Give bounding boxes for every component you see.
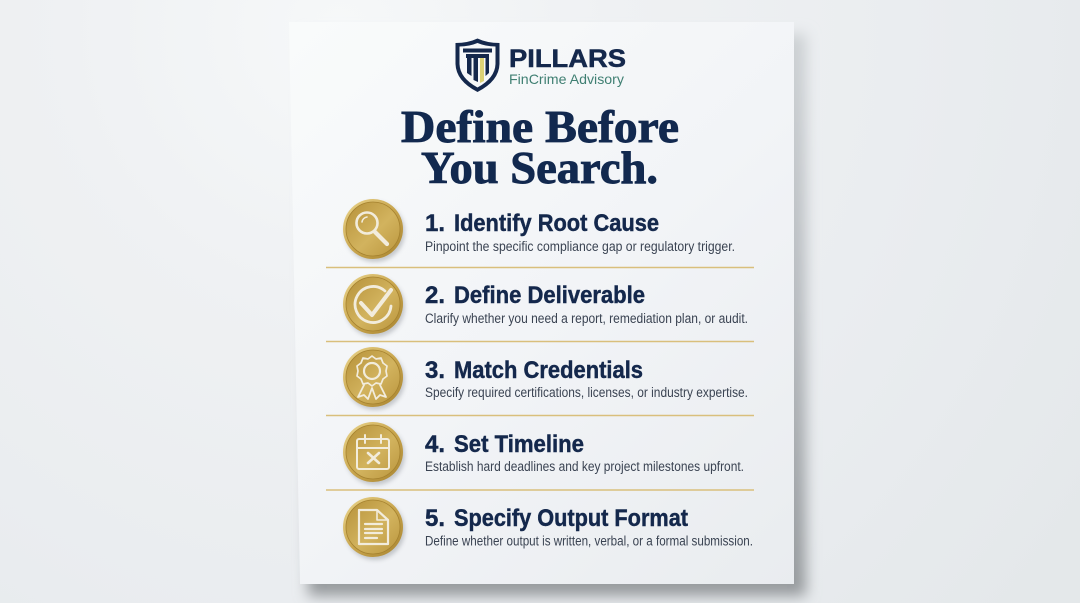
step 3 heading: 3. [425, 357, 445, 384]
step 5: specify output format [343, 497, 753, 560]
step 1 description: Pinpoint the specific compliance gap or regulatory trigger. [425, 239, 735, 254]
step 5 description: Define whether output is written, verbal, or a formal submission. [425, 534, 753, 548]
step 4: set timeline: Set Timeline [454, 431, 584, 458]
icon: award ribbon coin [343, 347, 405, 410]
paper panel [289, 22, 794, 584]
icon: shield with pillars [456, 38, 500, 92]
logo wordmark: PILLARS [509, 45, 626, 73]
icon: document coin [343, 497, 405, 560]
logo tagline: FinCrime Advisory [509, 71, 624, 87]
step 3: match credentials: Match Credentials [454, 357, 643, 384]
icon: check mark coin [343, 274, 405, 337]
icon: calendar coin [343, 422, 405, 485]
step 4: set timeline [343, 422, 744, 485]
title: Define Before [401, 102, 679, 152]
logo [456, 38, 626, 92]
divider lines [326, 268, 754, 490]
step 3: match credentials [343, 347, 748, 410]
title [401, 102, 679, 193]
step 2: define deliverable: Define Deliverable [454, 282, 645, 309]
step 4 heading: 4. [425, 431, 445, 458]
step 2: define deliverable [343, 274, 748, 337]
step 2 heading: 2. [425, 282, 445, 309]
paper shadow [305, 34, 806, 596]
step 1 heading: 1. [425, 210, 445, 237]
step 5 heading: 5. [425, 505, 445, 532]
step 4 description: Establish hard deadlines and key project milestones upfront. [425, 459, 744, 474]
title: You Search. [421, 143, 658, 193]
step 3 description: Specify required certifications, licenses, or industry expertise. [425, 385, 748, 400]
step 5: specify output format: Specify Output Format [454, 505, 688, 532]
step 2 description: Clarify whether you need a report, remediation plan, or audit. [425, 311, 748, 326]
step 1: identify root cause [343, 199, 735, 262]
icon: magnifying glass coin [343, 199, 405, 262]
step 1: identify root cause: Identify Root Cause [454, 210, 659, 237]
